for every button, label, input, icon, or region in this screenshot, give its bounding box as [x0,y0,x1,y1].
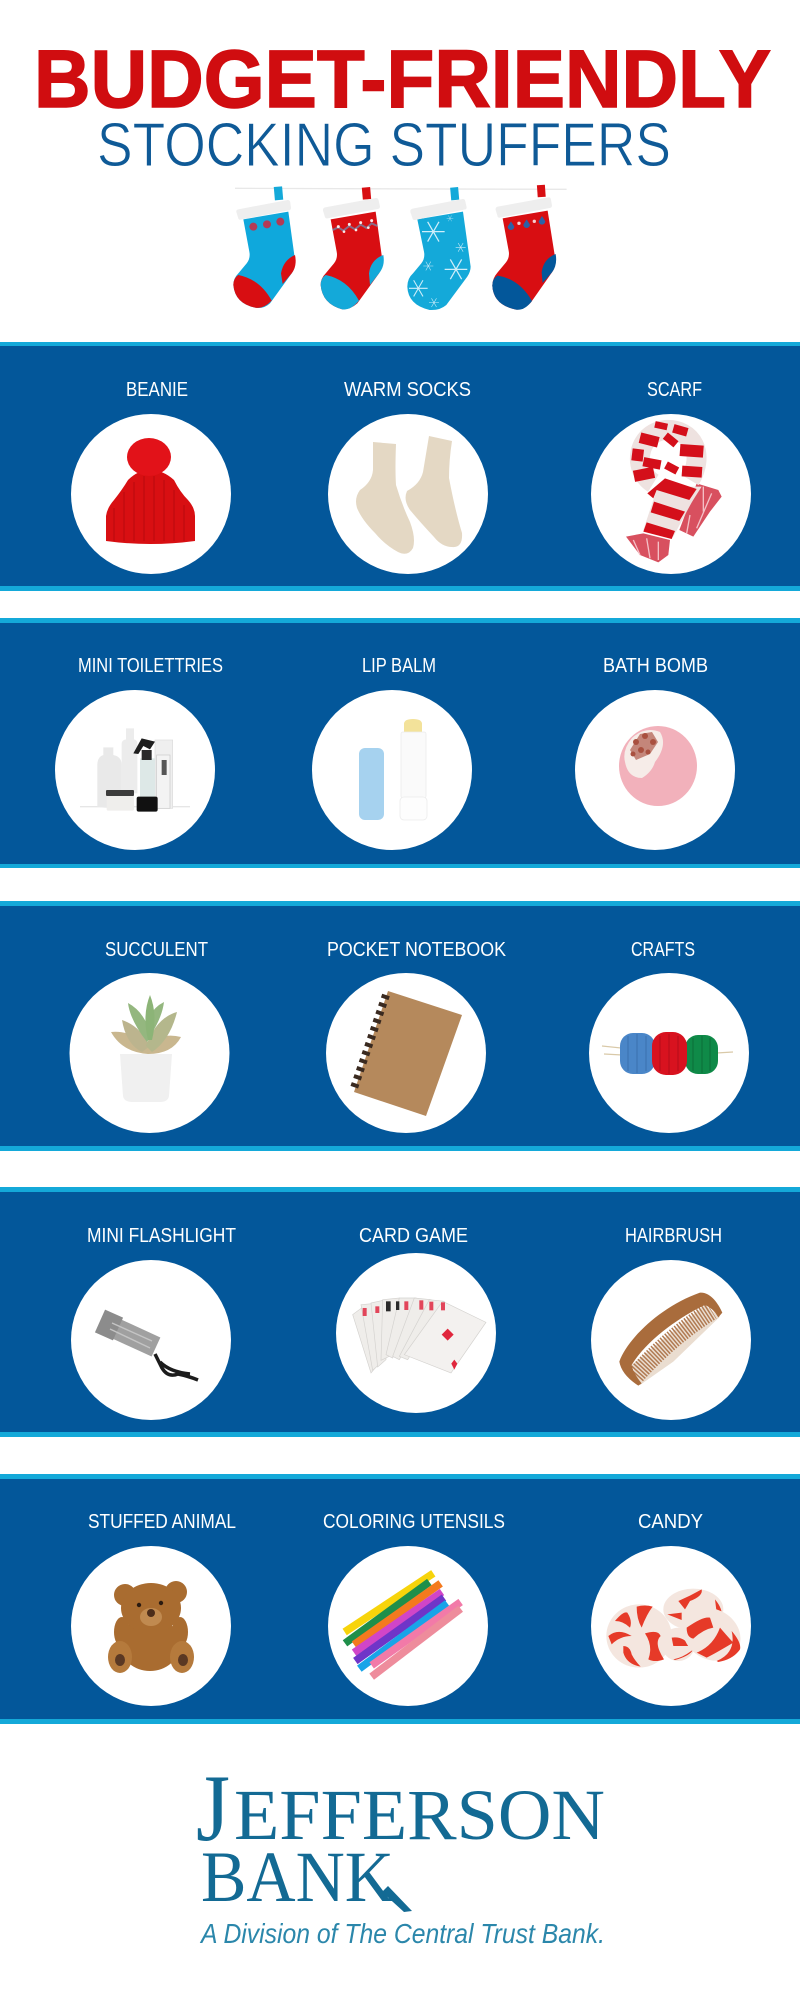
label: succulent: SUCCULENT [105,938,208,961]
stocking 2 [321,187,384,309]
icon: potted succulent [111,995,181,1102]
stocking 4 [492,185,556,310]
icon: playing cards [353,1298,486,1373]
circle: hairbrush [591,1260,751,1420]
item: card game [336,1224,496,1413]
label: crafts: CRAFTS [631,938,695,961]
item: beanie [71,378,231,574]
item: bath bomb [575,654,735,850]
label: bath bomb: BATH BOMB [603,654,708,677]
item: hairbrush [591,1224,751,1420]
item: succulent [70,938,230,1133]
item: lip balm [312,654,472,850]
icon: lip balm stick [359,719,427,820]
label: hairbrush: HAIRBRUSH [625,1224,722,1247]
logo word: bank: BANK [201,1837,394,1917]
icon: colored pens [345,1573,461,1677]
label: mini toilettries: MINI TOILETTRIES [78,654,223,677]
icon: peppermint candies [606,1589,750,1671]
circle: bath bomb [575,690,735,850]
stocking 1 [233,186,296,308]
subtitle: stocking stuffers: STOCKING STUFFERS [97,111,671,180]
icon: beanie hat [106,438,195,544]
icon: striped scarf [626,424,722,562]
panel: row 5 [0,1474,800,1724]
label: coloring utensils: COLORING UTENSILS [323,1510,505,1533]
circle: beanie [71,414,231,574]
illustration: hanging stockings [233,185,567,310]
item: mini toiletries [55,654,223,850]
fringe [626,483,722,562]
circle: mini toiletries [55,690,215,850]
icon: toiletry bottles [80,728,190,812]
item: pocket notebook [326,938,506,1133]
logo word: jefferson [196,1755,605,1861]
label: beanie: BEANIE [126,378,188,401]
logo word: jefferson: EFFERSON [234,1775,605,1855]
circle: candy [591,1546,751,1706]
circle: lip balm [312,690,472,850]
panel: row 3 [0,901,800,1151]
item: candy [591,1510,751,1706]
circle: scarf [591,414,751,574]
item: scarf [591,378,751,574]
label: candy: CANDY [638,1510,703,1533]
title: budget-friendly: BUDGET-FRIENDLY [34,34,771,125]
stocking 3 [407,187,471,310]
logo word: jefferson: J [196,1755,230,1861]
item: coloring utensils [323,1510,505,1706]
circle: stuffed animal [71,1546,231,1706]
icon: wooden comb [619,1293,722,1386]
circle: crafts [589,973,749,1133]
label: warm socks: WARM SOCKS [344,378,471,401]
icon: bath bomb [619,726,697,806]
circle: pocket notebook [326,973,486,1133]
item: crafts [589,938,749,1133]
icon: socks [356,436,462,554]
item: stuffed animal [71,1510,236,1706]
logo k tail [382,1886,412,1912]
tagline: A Division of The Central Trust Bank. [199,1918,605,1949]
label: lip balm: LIP BALM [362,654,436,677]
circle: warm socks [328,414,488,574]
label: scarf: SCARF [647,378,702,401]
logo: jefferson bank [196,1755,605,1949]
icon: teddy bear [108,1581,194,1673]
circle: card game [336,1253,496,1413]
panel: row 4 [0,1187,800,1437]
label: stuffed animal: STUFFED ANIMAL [88,1510,236,1533]
circle: coloring utensils [328,1546,488,1706]
label: mini flashlight: MINI FLASHLIGHT [87,1224,236,1247]
circle: succulent [70,973,230,1133]
icon: spiral notebook [354,991,462,1116]
panel: row 1 [0,342,800,591]
label: card game: CARD GAME [359,1224,468,1247]
item: warm socks [328,378,488,574]
circle: mini flashlight [71,1260,231,1420]
icon: yarn balls [602,1032,733,1075]
label: pocket notebook: POCKET NOTEBOOK [327,938,506,961]
panel: row 2 [0,618,800,868]
item: mini flashlight [71,1224,236,1420]
icon: flashlight [100,1321,198,1380]
